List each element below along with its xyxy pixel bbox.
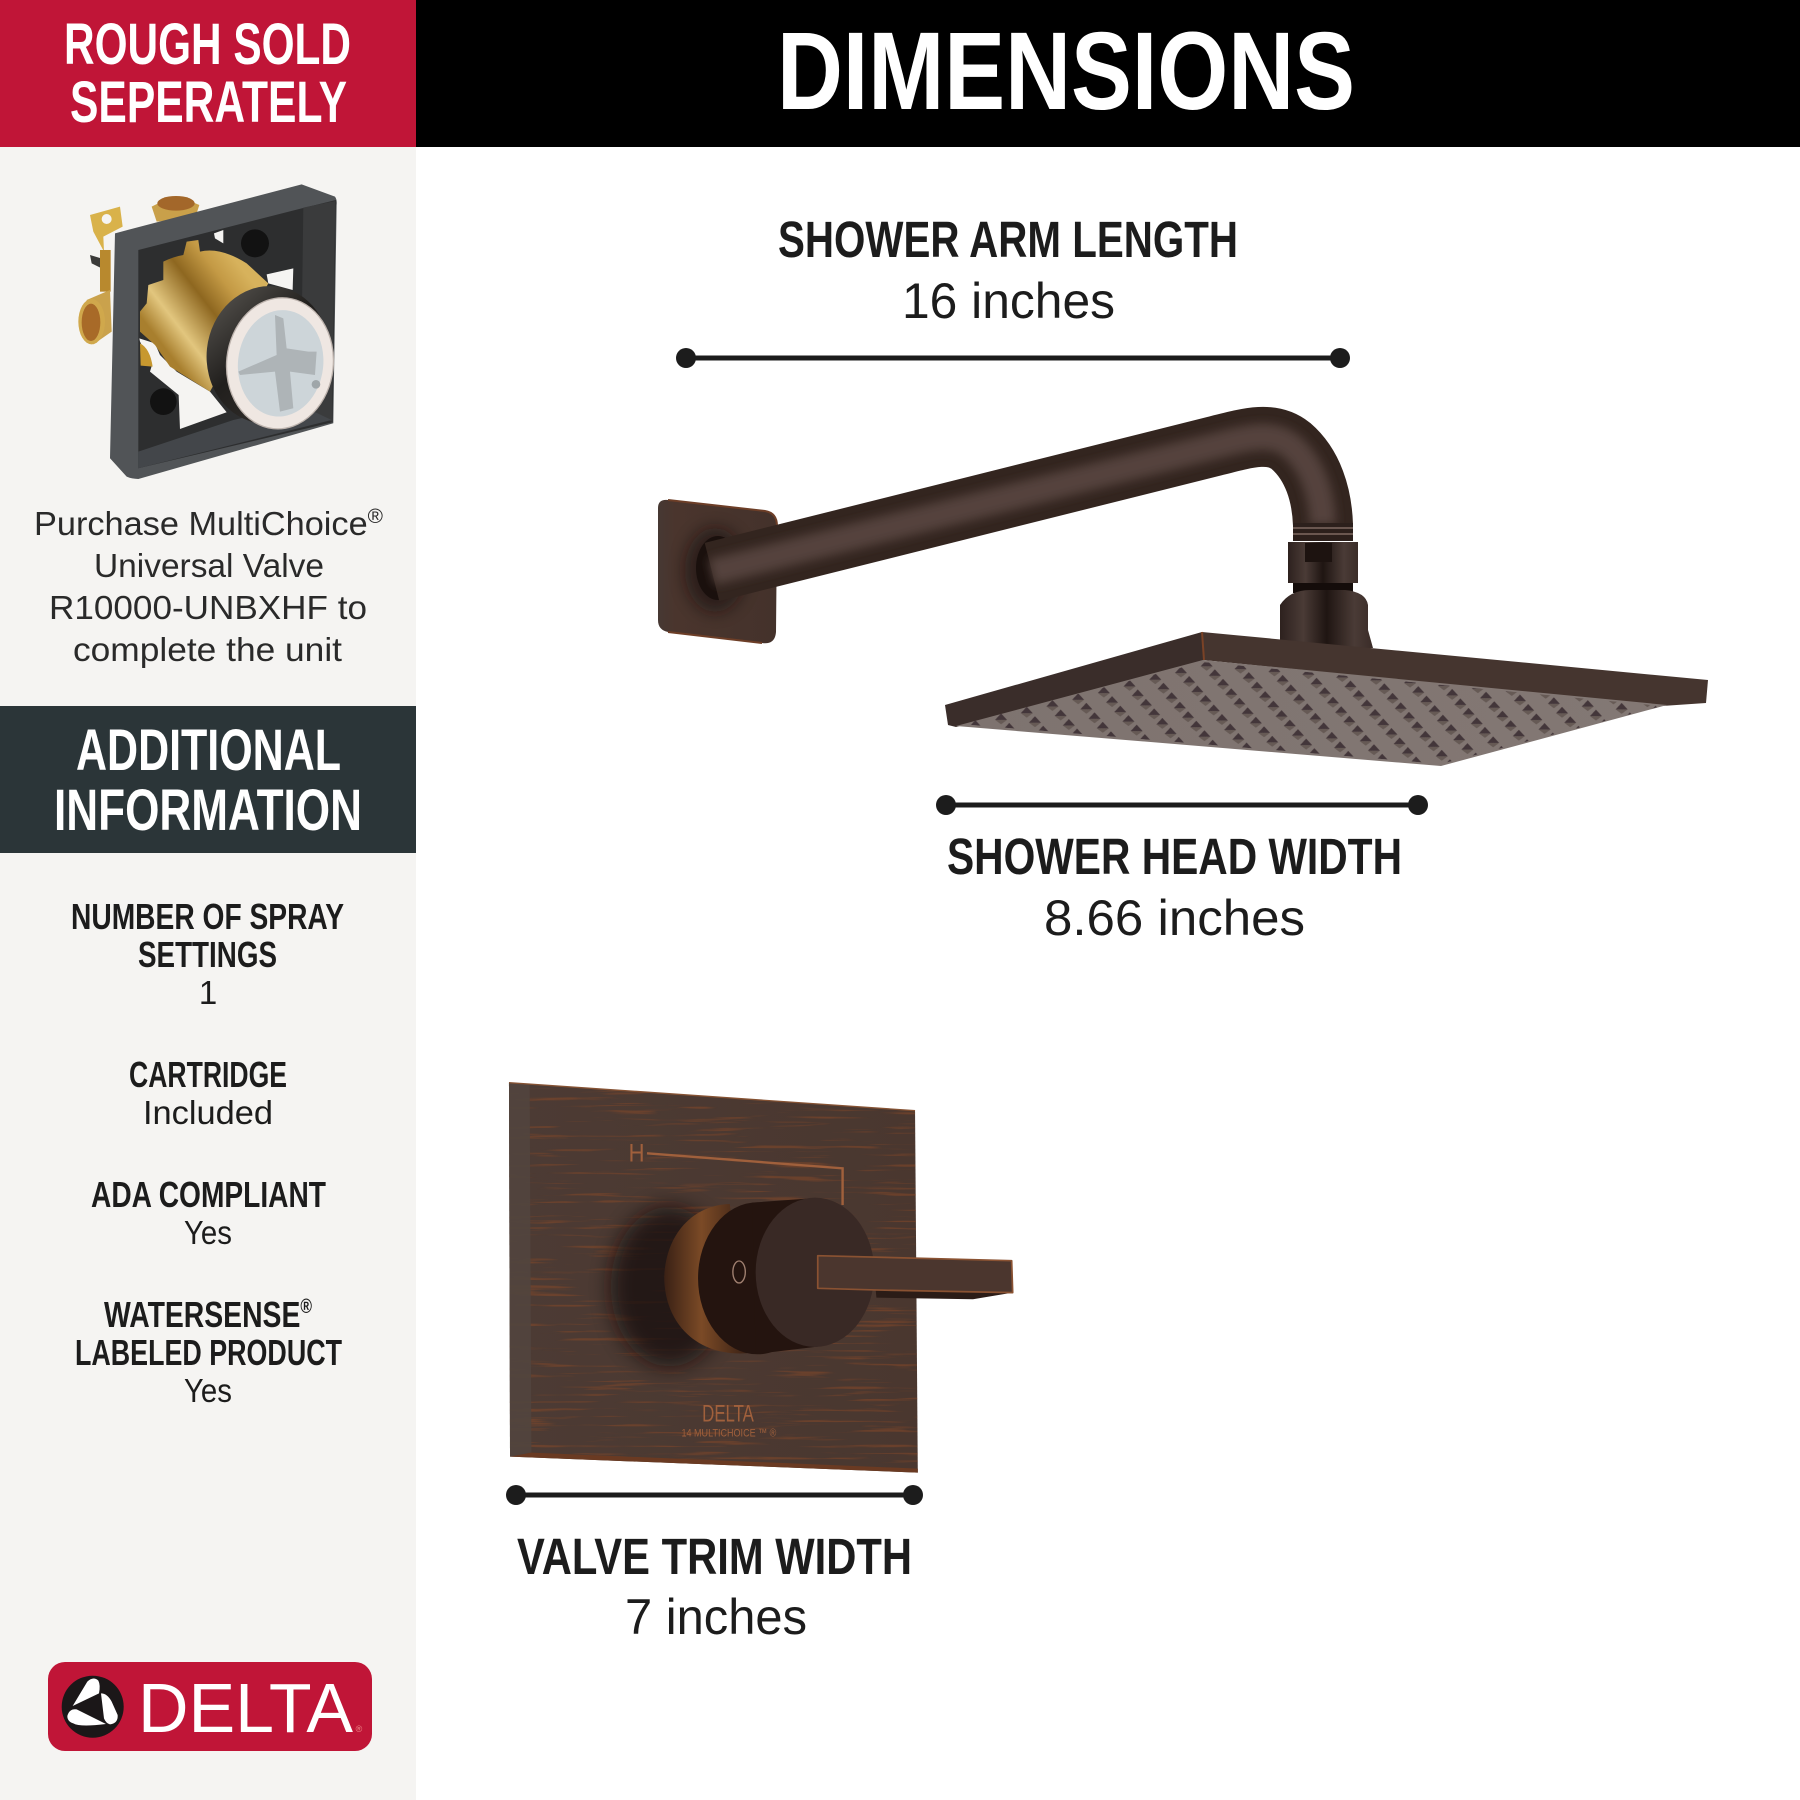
logo: delta: DELTA: [138, 1669, 353, 1747]
spec: number of spray settings: [71, 896, 344, 1011]
image: valve trim: DELTA: [702, 1401, 754, 1428]
spec: watersense labeled product: LABELED PRODUCT: [75, 1332, 342, 1373]
text: purchase valve note: R10000-UNBXHF to: [49, 589, 367, 626]
text: purchase valve note: Universal Valve: [94, 547, 324, 584]
image: valve trim: H: [629, 1140, 645, 1168]
spec: cartridge: Included: [143, 1094, 273, 1131]
dimension: shower arm length: SHOWER ARM LENGTH: [778, 211, 1238, 268]
dimension: shower head width: [936, 795, 1428, 946]
banner: rough sold separately: [0, 0, 416, 147]
image: rough-in valve: [78, 184, 340, 479]
text: purchase valve note: [34, 505, 383, 668]
banner: rough sold separately: ROUGH SOLD: [64, 12, 351, 77]
text: purchase valve note: Purchase MultiChoice: [34, 505, 355, 542]
title banner: dimensions: DIMENSIONS: [777, 10, 1355, 133]
text: purchase valve note: complete the unit: [73, 631, 342, 668]
banner: rough sold separately: SEPERATELY: [70, 70, 347, 135]
banner: additional information: ADDITIONAL: [76, 718, 341, 783]
image: shower arm and head: [658, 437, 1708, 766]
spec: watersense labeled product: WATERSENSE: [104, 1294, 353, 1335]
dimension: shower head width: 8.66 inches: [1044, 890, 1305, 946]
dimension: valve trim width: VALVE TRIM WIDTH: [517, 1528, 912, 1585]
spec: watersense labeled product: [75, 1294, 342, 1409]
spec: number of spray settings: NUMBER OF SPRAY: [71, 896, 344, 937]
spec: ada compliant: Yes: [184, 1214, 232, 1251]
spec: watersense labeled product: ®: [300, 1296, 312, 1318]
spec: cartridge: [129, 1054, 287, 1131]
logo: delta: [48, 1662, 372, 1751]
left sidebar panel: [0, 0, 416, 1800]
spec: ada compliant: [91, 1174, 326, 1251]
dimension: valve trim width: 7 inches: [625, 1589, 807, 1645]
banner: additional information: INFORMATION: [54, 778, 362, 843]
spec: cartridge: CARTRIDGE: [129, 1054, 287, 1095]
dimension: shower head width: SHOWER HEAD WIDTH: [947, 828, 1402, 885]
spec: ada compliant: ADA COMPLIANT: [91, 1174, 326, 1215]
logo: delta: ®: [356, 1724, 363, 1734]
dimension: valve trim width: [506, 1485, 923, 1645]
image: valve trim: 14 MULTICHOICE ™ ®: [681, 1428, 777, 1440]
spec: watersense labeled product: Yes: [184, 1372, 232, 1409]
image: valve trim: [509, 1083, 1013, 1474]
title banner: dimensions: [416, 0, 1800, 147]
spec: number of spray settings: 1: [199, 974, 217, 1011]
banner: additional information: [0, 706, 416, 853]
spec: number of spray settings: SETTINGS: [138, 934, 277, 975]
dimension: shower arm length: 16 inches: [902, 273, 1115, 329]
dimension: shower arm length: [676, 211, 1350, 368]
text: purchase valve note: ®: [368, 506, 383, 528]
